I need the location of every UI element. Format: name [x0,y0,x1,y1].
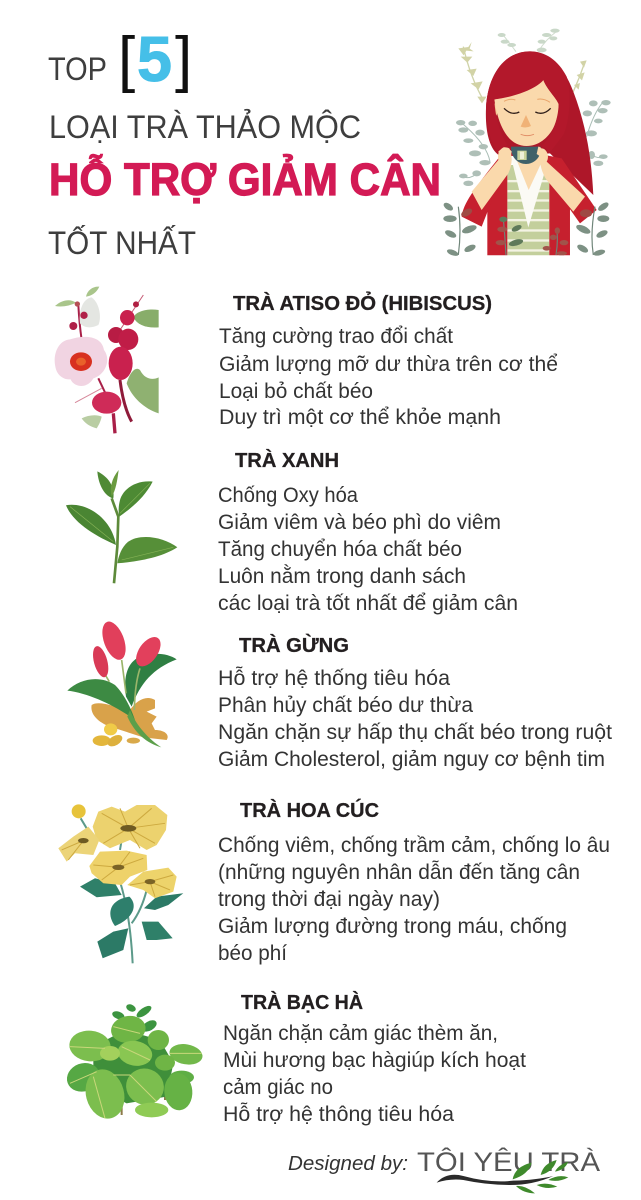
benefits list: Chống Oxy hóa [218,484,358,507]
benefits list: các loại trà tốt nhất để giảm cân [218,592,518,615]
section: green tea [66,449,518,615]
benefits list: Duy trì một cơ thể khỏe mạnh [219,406,501,429]
benefits list: Hỗ trợ hệ thông tiêu hóa [223,1103,454,1126]
title block: HỖ TRỢ GIẢM CÂN [49,154,441,205]
benefits list: béo phí [218,942,287,965]
illustration: chrysanthemum [58,804,183,963]
heading: TRÀ BẠC HÀ [241,991,363,1014]
number five in brackets: [ [118,25,135,94]
illustration: mint leaves [63,1003,204,1123]
benefits list: Luôn nằm trong danh sách [218,565,466,588]
logo: Tôi Yêu Trà: TÔI YÊU TRÀ [417,1146,600,1177]
front hair [486,51,570,152]
number five in brackets: ] [175,25,192,94]
benefits list: trong thời đại ngày nay) [218,888,440,911]
title block: TOP [48,51,107,87]
benefits list [218,667,612,771]
benefits list: Giảm Cholesterol, giảm nguy cơ bệnh tim [218,748,605,771]
heading: TRÀ ATISO ĐỎ (HIBISCUS) [233,291,492,315]
title block [48,23,441,261]
benefits list: Hỗ trợ hệ thống tiêu hóa [218,667,450,690]
section: mint tea [63,991,526,1126]
section: hibiscus tea [55,287,558,433]
back hair [486,51,593,195]
logo: Tôi Yêu Trà [417,1146,600,1193]
section: ginger tea [67,618,612,771]
background herb sprigs [456,29,611,186]
heading: TRÀ GỪNG [239,633,349,657]
benefits list [223,1022,526,1126]
benefits list: Giảm lượng đường trong máu, chống [218,915,567,938]
face [491,80,559,146]
heading: TRÀ XANH [235,449,339,472]
benefits list: (những nguyên nhân dẫn đến tăng cân [218,861,580,884]
illustration: woman drinking tea among herbs [442,29,611,257]
torso and shirt [487,153,570,255]
benefits list [218,484,518,615]
benefits list: cảm giác no [223,1076,333,1099]
heading: TRÀ HOA CÚC [240,798,379,822]
title block: TỐT NHẤT [48,225,196,261]
number five in brackets [118,23,192,95]
foreground herb sprigs [442,201,610,257]
benefits list: Loại bỏ chất béo [219,380,373,403]
benefits list: Ngăn chặn cảm giác thèm ăn, [223,1022,498,1045]
section: chrysanthemum tea [58,798,610,965]
footer credit [288,1146,600,1193]
benefits list: Tăng cường trao đổi chất [219,325,453,348]
benefits list: Giảm lượng mỡ dư thừa trên cơ thể [219,353,558,376]
number five in brackets: 5 [137,23,172,95]
benefits list: Phân hủy chất béo dư thừa [218,694,473,717]
benefits list [218,834,610,965]
benefits list: Ngăn chặn sự hấp thụ chất béo trong ruột [218,721,612,744]
benefits list: Giảm viêm và béo phì do viêm [218,511,501,534]
benefits list [219,325,558,429]
illustration: hibiscus [55,287,159,433]
title block: LOẠI TRÀ THẢO MỘC [49,109,361,145]
arms [462,147,597,227]
benefits list: Mùi hương bạc hàgiúp kích hoạt [223,1049,526,1072]
footer credit: Designed by: [288,1153,408,1175]
illustration: ginger [67,618,177,749]
illustration: tea sprig [66,470,177,583]
benefits list: Chống viêm, chống trầm cảm, chống lo âu [218,834,610,857]
benefits list: Tăng chuyển hóa chất béo [218,538,462,561]
tea cup [498,147,543,164]
